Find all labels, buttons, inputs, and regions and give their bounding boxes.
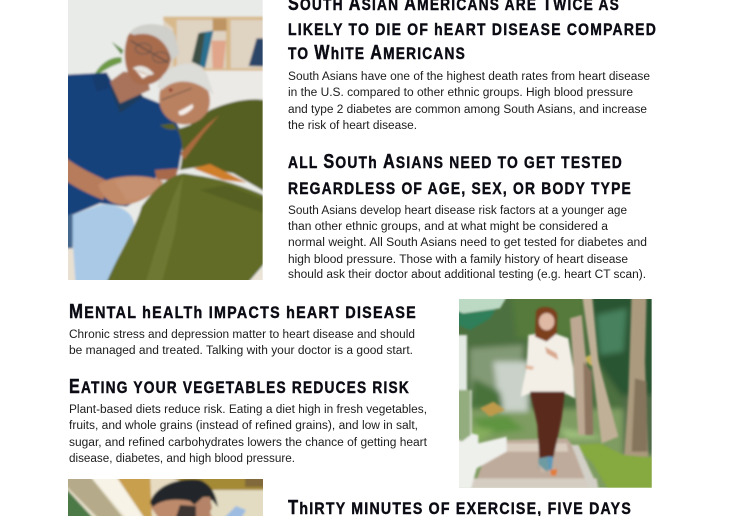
heading: get tested: ALL SOUTh ASIANS NEED TO GET TESTED	[288, 151, 623, 173]
text: death rates	[288, 71, 650, 132]
heading: get tested	[288, 151, 632, 198]
text: testing: normal weight. All South Asians need to get tested for diabetes and	[288, 237, 647, 249]
photo: woman in hijab jogging on a garden path	[459, 299, 652, 488]
text: testing	[288, 205, 647, 281]
heading: twice as likely	[288, 0, 657, 64]
woman's skirt	[106, 172, 263, 280]
heading: get tested: REGARDLESS OF AGE, SEX, OR BODY TYPE	[288, 179, 632, 198]
heading: twice as likely: TO WhITE AMERICANS	[288, 42, 466, 64]
text: testing: high blood pressure. Those with a family history of heart disease	[288, 254, 628, 266]
text: mental health: Chronic stress and depression matter to heart disease and should	[69, 329, 415, 341]
text: death rates: South Asians have one of the highest death rates from heart disease	[288, 71, 650, 83]
text: plant-based diets: disease, diabetes, and high blood pressure.	[69, 453, 295, 465]
heading: vegetables: EATING YOUR VEGETABLES REDUCES RISK	[69, 376, 410, 398]
photo: older South Asian couple on a sofa	[68, 0, 263, 280]
text: testing: should ask their doctor about additional testing (e.g. heart CT scan).	[288, 269, 646, 281]
heading: twice as likely: LIKELY TO DIE OF hEART DISEASE COMPARED	[288, 20, 657, 39]
text: mental health: be managed and treated. Talking with your doctor is a good start.	[69, 345, 413, 357]
text: plant-based diets: fruits, and whole grains (instead of refined grains), and low in salt,	[69, 420, 418, 432]
woman's head	[159, 74, 210, 125]
woman's saree top	[160, 98, 263, 192]
text: mental health	[69, 329, 415, 357]
photo: man in blue shirt, cropped at page bottom	[68, 479, 263, 516]
text: death rates: in the U.S. compared to other ethnic groups. High blood pressure	[288, 87, 633, 99]
man's shirt	[60, 73, 184, 220]
text: testing: than other ethnic groups, and at what might be considered a	[288, 221, 609, 233]
man's head	[125, 27, 172, 85]
heading: mental health: MENTAL hEALTh IMPACTS hEART DISEASE	[69, 301, 417, 323]
text: plant-based diets: sugar, and refined carbohydrates lowers the chance of getting heart	[69, 437, 428, 449]
text: plant-based diets	[69, 404, 428, 465]
text: death rates: the risk of heart disease.	[288, 120, 417, 132]
text: testing: South Asians develop heart disease risk factors at a younger age	[288, 205, 627, 217]
text: plant-based diets: Plant-based diets reduce risk. Eating a diet high in fresh vegetables,	[69, 404, 427, 416]
text: death rates: and type 2 diabetes are common among South Asians, and increase	[288, 104, 647, 116]
